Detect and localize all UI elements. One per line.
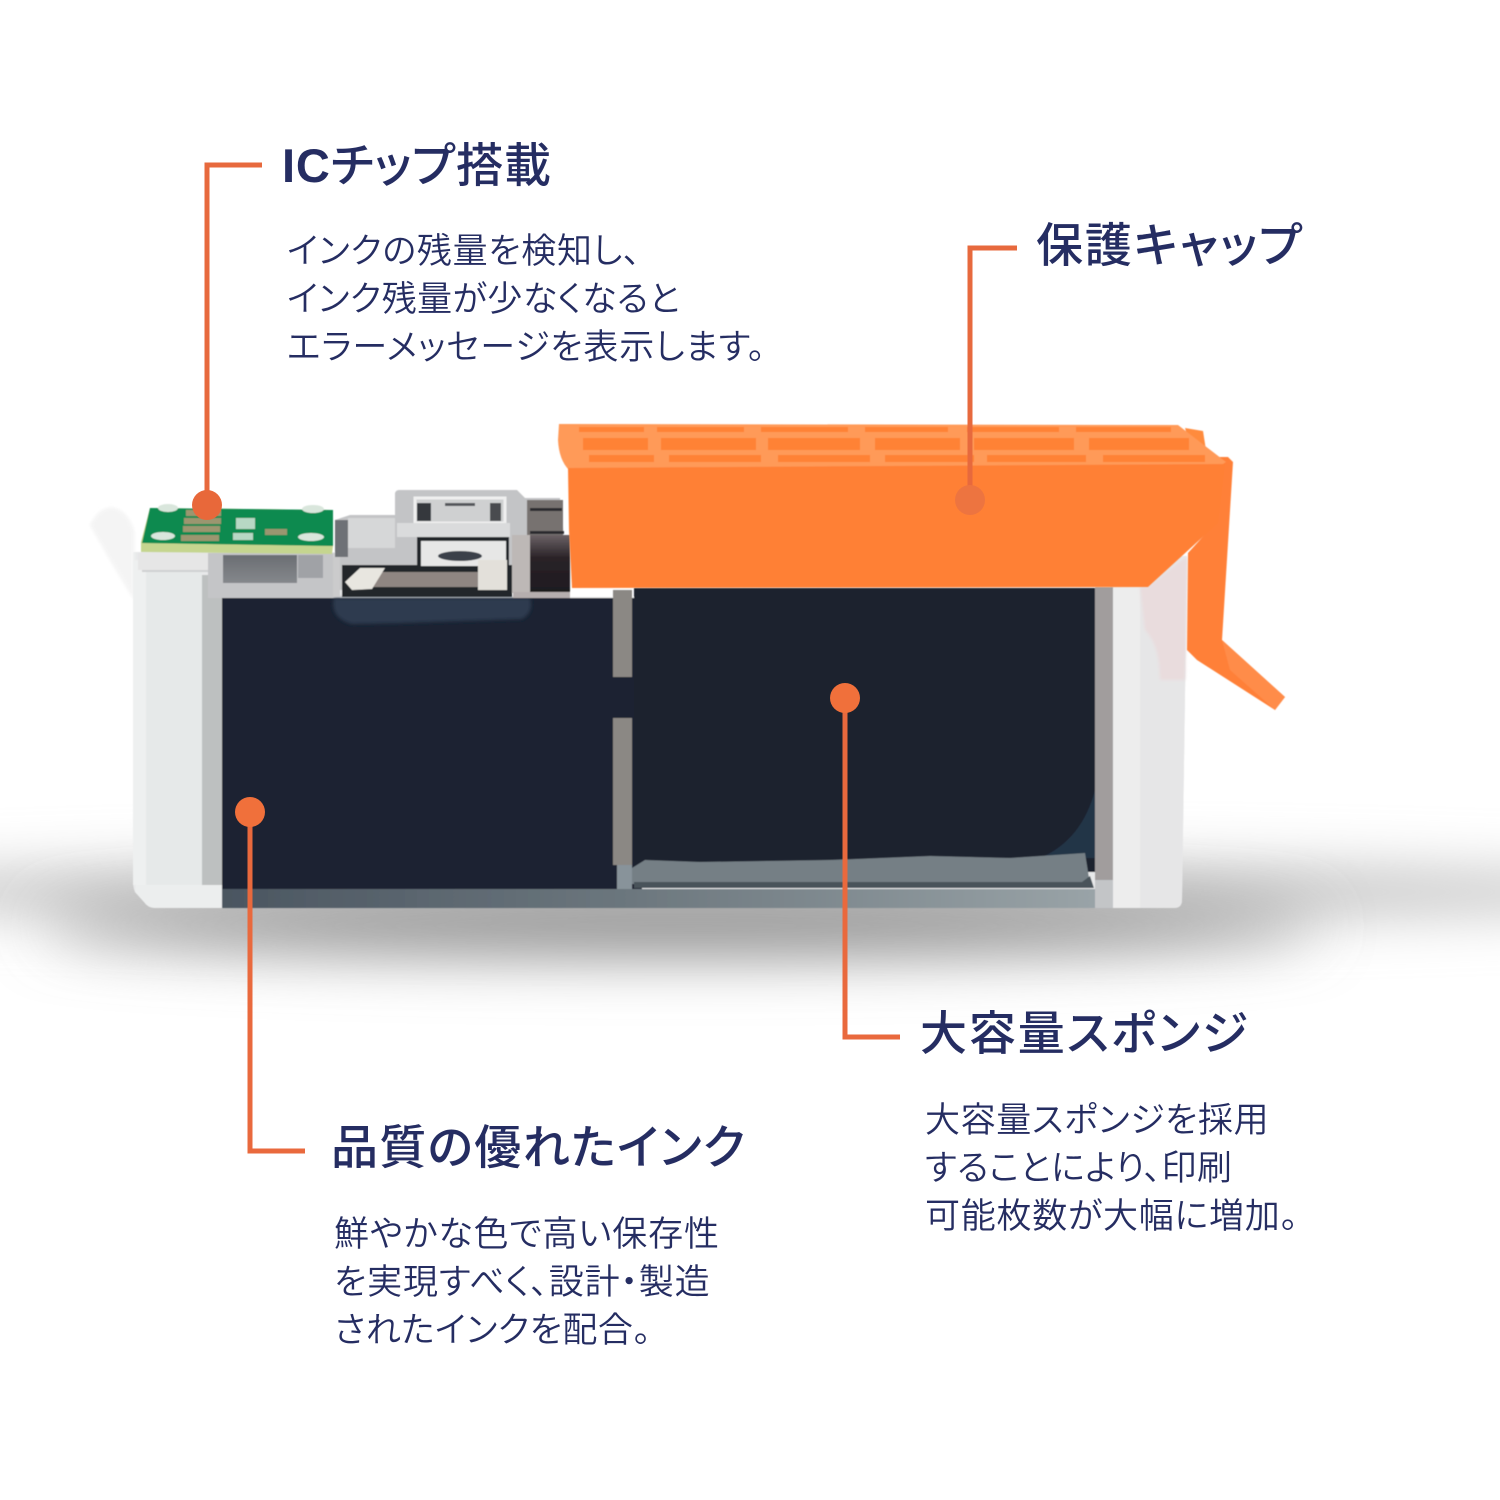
pink cap reflection	[1140, 556, 1187, 680]
callout line: IC chip	[192, 165, 262, 520]
text block: ink	[334, 1215, 720, 1350]
bottom strip	[222, 889, 1102, 908]
text block: ink: 鮮やかな色で高い保存性	[334, 1215, 720, 1254]
area under chip	[208, 553, 333, 598]
window frame	[415, 498, 505, 523]
cap top face	[558, 424, 1226, 470]
text block: IC chip: インク残量が少なくなると	[287, 280, 680, 319]
left clip	[335, 520, 348, 557]
callout line: protective cap	[955, 248, 1017, 515]
dark cavity	[342, 565, 512, 597]
callout line: ink	[235, 797, 305, 1151]
IC chip	[141, 504, 333, 554]
lower reflections	[373, 572, 480, 587]
lever highlight	[1222, 640, 1285, 710]
ink cartridge	[90, 490, 1187, 908]
chip contacts	[181, 510, 287, 541]
left ink chamber	[222, 598, 642, 890]
text block: IC chip	[287, 232, 766, 367]
cartridge body	[133, 552, 1187, 908]
text block: IC chip: エラーメッセージを表示します。	[287, 328, 766, 367]
heading: ink: 品質の優れたインク	[331, 1121, 746, 1174]
right ink sponge	[634, 588, 1095, 872]
text block: sponge: 可能枚数が大幅に増加。	[925, 1197, 1299, 1236]
text block: sponge: することにより、印刷	[925, 1149, 1232, 1188]
ink surface patch	[333, 598, 531, 624]
callout line: sponge	[830, 683, 900, 1037]
text block: ink: されたインクを配合。	[334, 1311, 651, 1350]
cap tab	[1185, 428, 1206, 450]
protective cap	[558, 424, 1285, 710]
ink corner tint	[1040, 790, 1095, 858]
heading: sponge: 大容量スポンジ	[920, 1007, 1250, 1060]
drop shadow under cartridge	[0, 860, 1500, 954]
text block: sponge: 大容量スポンジを採用	[925, 1101, 1269, 1140]
heading: protective cap: 保護キャップ	[1036, 219, 1304, 272]
cap front face	[568, 464, 1225, 588]
cap grid holes	[579, 427, 1205, 462]
housing silhouette	[335, 490, 570, 598]
chamber divider	[613, 590, 632, 890]
sponge lower band	[632, 853, 1090, 884]
text block: ink: を実現すべく、設計・製造	[334, 1263, 710, 1302]
sponge lower edge line	[634, 876, 1094, 888]
text block: sponge	[925, 1101, 1299, 1236]
cap lever	[1187, 457, 1285, 710]
right frame and dark window	[512, 535, 530, 593]
clear top mechanism	[330, 490, 570, 598]
chip solder pads	[151, 504, 324, 541]
heading: IC chip: ICチップ搭載	[282, 139, 552, 192]
text block: IC chip: インクの残量を検知し、	[287, 232, 641, 271]
right wall	[1095, 556, 1187, 908]
left clear wall	[90, 508, 340, 908]
